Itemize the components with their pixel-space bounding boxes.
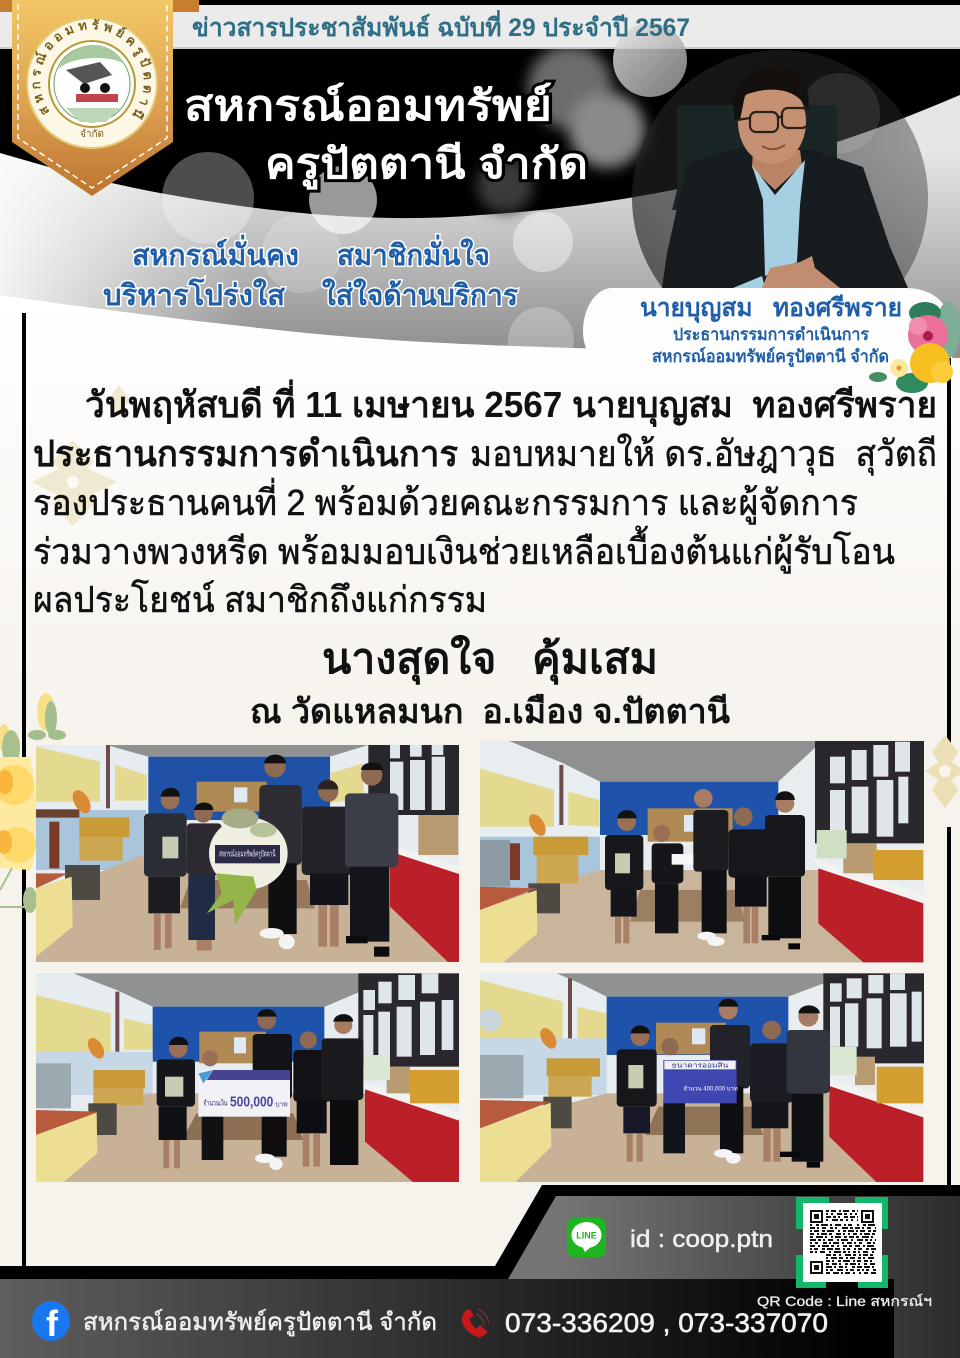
slogans: ใส่ใจด้านบริการ [322,278,518,312]
icon: facebook: f [46,1303,59,1344]
neck [752,150,802,190]
cheque banner: 500,000 [230,1095,273,1111]
logo seal: สหกรณ์ออมทรัพย์ครูปัตตานี [32,18,152,120]
LINE contact panel [508,1196,960,1358]
main title [184,82,588,190]
slogans: บริหารโปร่งใส [103,277,285,312]
icon: yellow flower left [0,693,66,913]
body paragraph: ผลประโยชน์ สมาชิกถึงแก่กรรม [33,579,487,620]
phone numbers: 073-336209 , 073-337070 [505,1308,828,1338]
cheque banner: ธนาคารออมสิน [672,1061,729,1069]
chair [672,105,837,210]
icon: tropical flowers [869,302,960,393]
body paragraph: ประธานกรรมการดำเนินการ [33,433,459,474]
cheque banner: บาท [275,1102,288,1109]
icon: Thai ornament right [925,735,960,808]
frame lines [22,313,951,1268]
wreath [209,817,288,889]
icon: phone [462,1309,489,1338]
face [738,80,806,164]
hands [762,256,840,288]
newsletter issue text: ข่าวสารประชาสัมพันธ์ ฉบับที่ 29 ประจำปี 2567 [192,10,690,42]
people [169,1045,188,1058]
decorative bubbles [162,45,645,373]
slogans: สหกรณ์มั่นคง [132,234,299,272]
body paragraph [33,379,937,620]
name pill: ประธานกรรมการดำเนินการ [673,325,870,344]
line id: id : coop.ptn [630,1226,773,1253]
body paragraph: มอบหมายให้ ดร.อัษฎาวุธ สุวัตถี [470,433,937,476]
footer bar [0,1279,894,1358]
QR caption: QR Code : Line สหกรณ์ฯ [757,1293,932,1309]
body paragraph: ร่วมวางพวงหรีด พร้อมมอบเงินช่วยเหลือเบื้องต้นแก่ผู้รับโอน [33,525,895,574]
green corners [796,1197,888,1288]
ribbon badge with logo [0,0,199,196]
name pill [583,288,952,372]
glasses [737,108,808,132]
main title: สหกรณ์ออมทรัพย์ [184,82,552,129]
slogans: สมาชิกมั่นใจ [337,234,490,272]
suit [662,147,908,288]
cheque banner: จำนวน 400,000 บาท [683,1086,738,1093]
icon: LINE: LINE [576,1230,597,1240]
header background: black wave [0,0,960,218]
venue: ณ วัดแหลมนก อ.เมือง จ.ปัตตานี [250,693,730,731]
people [630,1033,650,1046]
shirt [752,160,805,276]
slogans [103,234,518,312]
body paragraph: วันพฤหัสบดี ที่ 11 เมษายน 2567 นายบุญสม ทองศรีพราย [85,379,937,428]
header background: grey wave [0,90,960,358]
photo 3: cheque 500,000 baht [36,973,459,1183]
main title: ครูปัตตานี จำกัด [265,140,588,190]
photo 2: envelope handover [480,740,925,963]
icon: facebook [32,1301,70,1344]
name pill: นายบุญสม ทองศรีพราย [640,294,902,324]
photo 1: wreath presentation [36,745,459,962]
photo 1: wreath presentation: สหกรณ์ออมทรัพย์ครูปัตตานี [219,849,276,860]
bottom black frame [0,1185,960,1358]
facebook name: สหกรณ์ออมทรัพย์ครูปัตตานี จำกัด [83,1308,437,1337]
people [160,796,180,810]
body paragraph: รองประธานคนที่ 2 พร้อมด้วยคณะกรรมการ และผู้จัดการ [33,478,858,525]
people [617,818,636,831]
QR code [796,1197,888,1288]
photo 4: bank cheque [479,973,925,1183]
cheque banner [198,1070,290,1117]
top newsletter strip [0,5,960,97]
portrait circle and chairman photo [632,50,928,346]
cheque banner: จำนวนเงิน [203,1099,228,1108]
deceased member name: นางสุดใจ คุ้มเสม [322,634,658,685]
mouth [762,145,785,149]
name pill: สหกรณ์ออมทรัพย์ครูปัตตานี จำกัด [652,346,889,368]
finder patterns [811,1211,873,1273]
faint Thai ornaments [32,385,130,526]
icon: LINE [567,1218,606,1257]
logo seal: จำกัด [80,129,104,140]
cheque banner [663,1060,738,1103]
